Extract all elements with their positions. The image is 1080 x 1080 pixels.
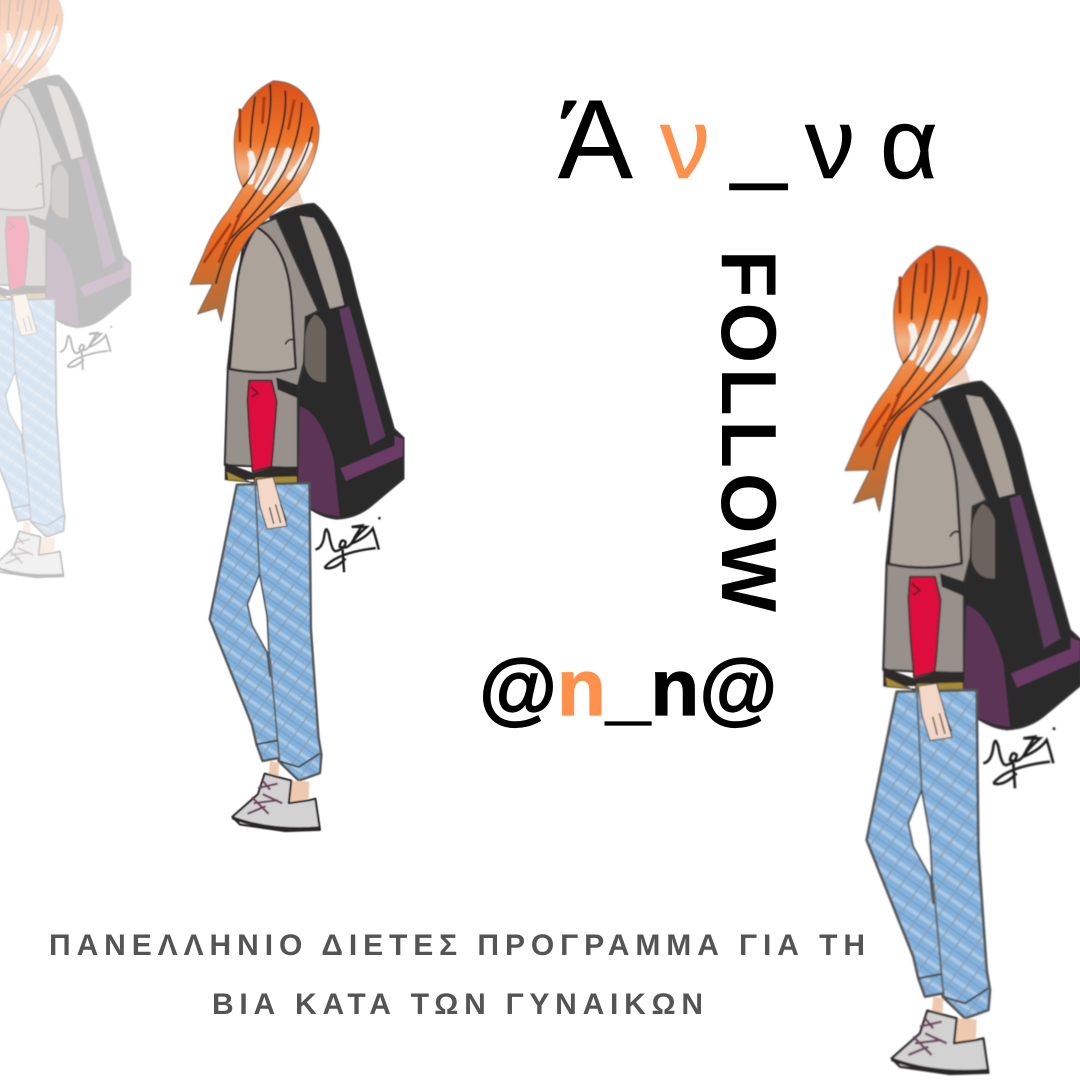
faded figure: left bbox=[0, 0, 130, 577]
heading: FOLLOW (rotated): FOLLOW bbox=[705, 250, 793, 612]
illustrated figure: middle bbox=[190, 81, 404, 831]
handle: @n_n@: @n_n@ bbox=[479, 643, 777, 732]
caption: ΠΑΝΕΛΛΗΝΙΟ ΔΙΕΤΕΣ ΠΡΟΓΡΑΜΜΑ ΓΙΑ ΤΗ bbox=[49, 929, 865, 962]
logo: Άν_να: α bbox=[880, 88, 938, 200]
logo: Άν_να: ν bbox=[660, 88, 710, 200]
caption bbox=[49, 929, 865, 1021]
logo: Άν_να: Ά bbox=[558, 77, 633, 202]
caption: ΒΙΑ ΚΑΤΑ ΤΩΝ ΓΥΝΑΙΚΩΝ bbox=[212, 988, 703, 1021]
logo: Άν_να: ν bbox=[805, 88, 855, 200]
logo: Άν_να: _ bbox=[729, 80, 788, 192]
illustrated figure: right bbox=[845, 246, 1080, 1074]
